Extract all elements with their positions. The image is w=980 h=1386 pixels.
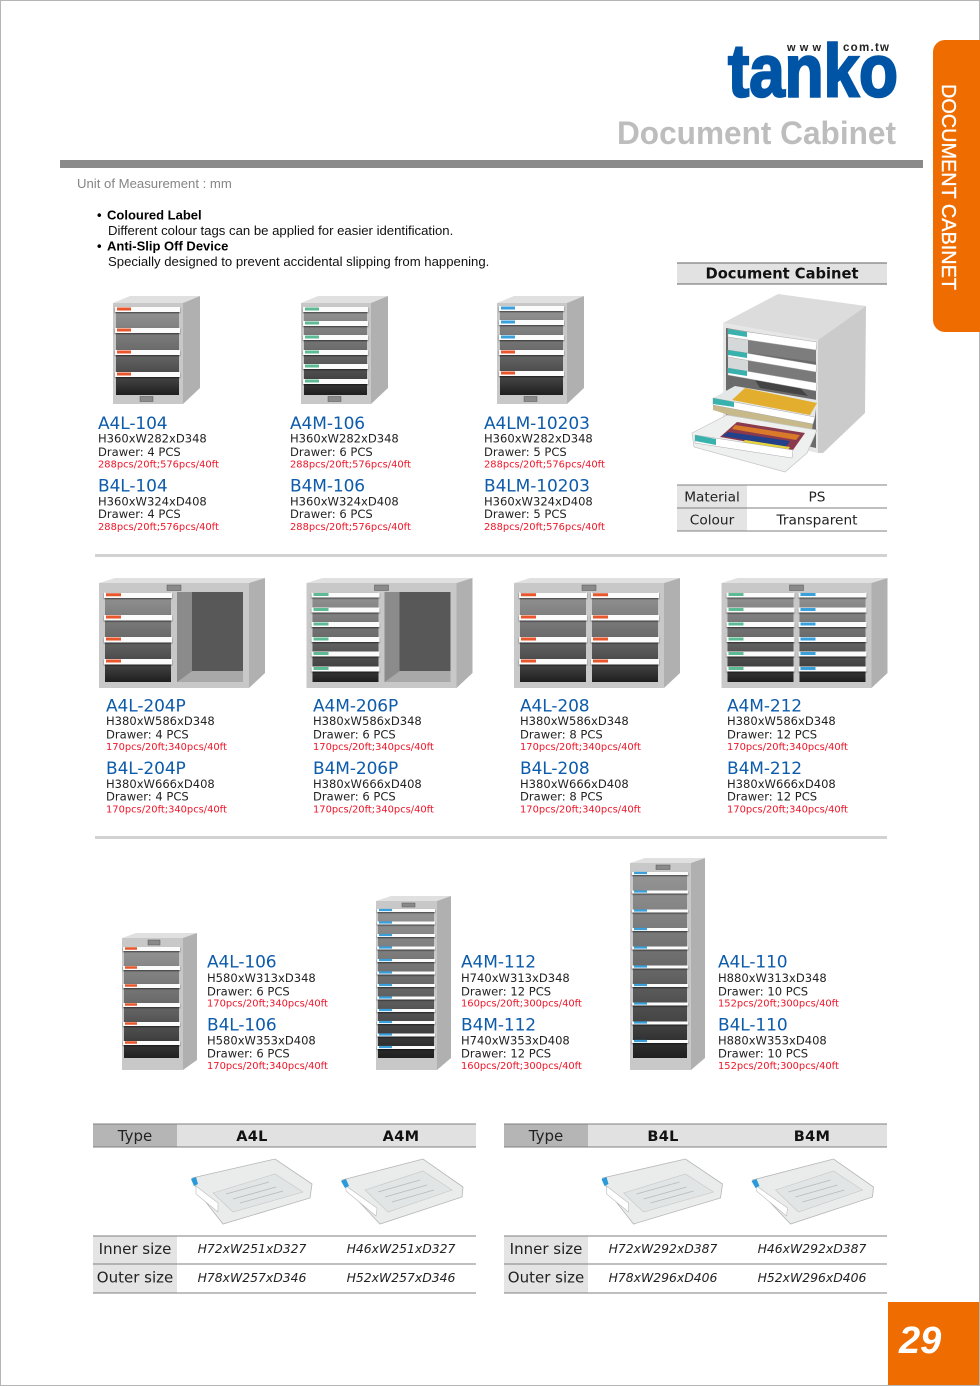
- model specs: A4L-106 / B4L-106: 170pcs/20ft;340pcs/40ft: [207, 998, 328, 1010]
- model specs: A4L-204P / B4L-204P: B4L-204P: [106, 759, 186, 779]
- page number: [888, 1302, 979, 1385]
- model specs: A4LM-10203 / B4LM-10203: [484, 414, 605, 533]
- model specs: A4L-106 / B4L-106: [207, 952, 328, 1072]
- model specs: A4L-104 / B4L-104: H360xW282xD348: [98, 432, 207, 446]
- model specs: A4L-104 / B4L-104: A4L-104: [98, 414, 168, 434]
- cabinet: A4M-206P: [306, 578, 472, 688]
- model specs: A4M-106 / B4M-106: A4M-106: [290, 414, 365, 434]
- model specs: A4L-104 / B4L-104: B4L-104: [98, 476, 168, 496]
- model specs: A4M-106 / B4M-106: Drawer: 6 PCS: [290, 507, 373, 521]
- model specs: A4L-110 / B4L-110: 152pcs/20ft;300pcs/40ft: [718, 1061, 839, 1072]
- model specs: A4L-110 / B4L-110: Drawer: 10 PCS: [718, 985, 808, 999]
- logo: tanko: www: [786, 42, 821, 54]
- model specs: A4L-204P / B4L-204P: H380xW666xD408: [106, 777, 215, 791]
- model specs: A4M-212 / B4M-212: 170pcs/20ft;340pcs/40ft: [727, 804, 848, 816]
- model specs: A4M-106 / B4M-106: H360xW282xD348: [290, 432, 399, 446]
- model specs: A4M-112 / B4M-112: H740xW353xD408: [461, 1034, 570, 1048]
- table: B4 drawer sizes: B4L: [647, 1129, 679, 1145]
- product specification table: Colour: [690, 512, 735, 528]
- model specs: A4L-204P / B4L-204P: [106, 696, 227, 816]
- model specs: A4L-208 / B4L-208: [520, 696, 641, 816]
- table: A4 drawer sizes: H52xW257xD346: [347, 1270, 456, 1285]
- product specification table: PS: [809, 490, 825, 506]
- product specification table: [677, 485, 887, 531]
- model specs: A4M-212 / B4M-212: A4M-212: [727, 696, 802, 716]
- model specs: A4M-206P / B4M-206P: H380xW586xD348: [313, 714, 422, 728]
- table: B4 drawer sizes: H78xW296xD406: [609, 1270, 718, 1285]
- feature list: Anti-Slip Off Device: [107, 238, 228, 254]
- model specs: A4L-208 / B4L-208: Drawer: 8 PCS: [520, 728, 603, 742]
- cabinet: A4L-110: [630, 858, 705, 1070]
- model specs: A4M-206P / B4M-206P: H380xW666xD408: [313, 777, 422, 791]
- model specs: A4L-208 / B4L-208: 170pcs/20ft;340pcs/40ft: [520, 742, 641, 753]
- table: B4 drawer sizes: B4M: [794, 1129, 830, 1145]
- side tab: document cabinet: [933, 40, 980, 332]
- model specs: A4L-208 / B4L-208: B4L-208: [520, 759, 590, 779]
- model specs: A4M-112 / B4M-112: 160pcs/20ft;300pcs/40ft: [461, 1061, 582, 1072]
- model specs: A4LM-10203 / B4LM-10203: Drawer: 5 PCS: [484, 507, 567, 521]
- table: B4 drawer sizes: H46xW292xD387: [758, 1241, 867, 1256]
- model specs: A4M-212 / B4M-212: H380xW586xD348: [727, 714, 836, 728]
- model specs: A4L-110 / B4L-110: A4L-110: [718, 952, 788, 972]
- model specs: A4M-206P / B4M-206P: 170pcs/20ft;340pcs/40ft: [313, 742, 434, 753]
- model specs: A4L-104 / B4L-104: Drawer: 4 PCS: [98, 507, 181, 521]
- model specs: A4M-112 / B4M-112: 160pcs/20ft;300pcs/40ft: [461, 998, 582, 1010]
- model specs: A4LM-10203 / B4LM-10203: H360xW282xD348: [484, 432, 593, 446]
- model specs: A4M-106 / B4M-106: Drawer: 6 PCS: [290, 445, 373, 459]
- side tab: document cabinet: DOCUMENT CABINET: [937, 84, 959, 290]
- model specs: A4L-110 / B4L-110: Drawer: 10 PCS: [718, 1046, 808, 1060]
- table: A4 drawer sizes: [93, 1124, 476, 1293]
- model specs: A4L-104 / B4L-104: 288pcs/20ft;576pcs/40ft: [98, 522, 219, 533]
- page title: Document Cabinet: [617, 115, 896, 151]
- model specs: A4M-112 / B4M-112: [461, 952, 582, 1072]
- product specification table: Material: [684, 490, 740, 506]
- product specification table: Transparent: [775, 512, 858, 528]
- model specs: A4M-112 / B4M-112: B4M-112: [461, 1016, 536, 1036]
- icon: B4L drawer: [602, 1159, 722, 1224]
- model specs: A4M-212 / B4M-212: Drawer: 12 PCS: [727, 728, 817, 742]
- model specs: A4L-106 / B4L-106: H580xW313xD348: [207, 971, 316, 985]
- model specs: A4LM-10203 / B4LM-10203: 288pcs/20ft;576pcs/40ft: [484, 460, 605, 471]
- table: A4 drawer sizes: Outer size: [97, 1268, 173, 1286]
- model specs: A4L-204P / B4L-204P: Drawer: 4 PCS: [106, 728, 189, 742]
- table: A4 drawer sizes: A4M: [383, 1129, 419, 1145]
- table: A4 drawer sizes: Inner size: [99, 1240, 171, 1258]
- product panel heading: [677, 263, 887, 284]
- icon: B4M drawer: [752, 1159, 874, 1224]
- product photo: transparent drawer cabinet: [692, 294, 866, 472]
- model specs: A4L-104 / B4L-104: 288pcs/20ft;576pcs/40ft: [98, 460, 219, 471]
- model specs: A4L-208 / B4L-208: A4L-208: [520, 696, 590, 716]
- model specs: A4L-204P / B4L-204P: H380xW586xD348: [106, 714, 215, 728]
- model specs: A4M-206P / B4M-206P: B4M-206P: [313, 759, 398, 779]
- model specs: A4L-204P / B4L-204P: 170pcs/20ft;340pcs/40ft: [106, 804, 227, 816]
- model specs: A4L-110 / B4L-110: B4L-110: [718, 1016, 788, 1036]
- model specs: A4M-212 / B4M-212: Drawer: 12 PCS: [727, 790, 817, 804]
- cabinet: A4L-106: [122, 933, 197, 1070]
- logo: tanko: com.tw: [843, 42, 889, 54]
- model specs: A4L-104 / B4L-104: Drawer: 4 PCS: [98, 445, 181, 459]
- model specs: A4M-206P / B4M-206P: [313, 696, 434, 816]
- model specs: A4L-208 / B4L-208: H380xW586xD348: [520, 714, 629, 728]
- model specs: A4L-204P / B4L-204P: A4L-204P: [106, 696, 186, 716]
- feature list: Coloured Label: [107, 208, 202, 222]
- table: B4 drawer sizes: Inner size: [510, 1240, 582, 1258]
- model specs: A4L-106 / B4L-106: 170pcs/20ft;340pcs/40ft: [207, 1061, 328, 1072]
- model specs: A4M-112 / B4M-112: H740xW313xD348: [461, 971, 570, 985]
- model specs: A4L-110 / B4L-110: H880xW353xD408: [718, 1034, 827, 1048]
- model specs: A4M-112 / B4M-112: A4M-112: [461, 952, 536, 972]
- model specs: A4L-104 / B4L-104: [98, 414, 219, 533]
- model specs: A4M-106 / B4M-106: 288pcs/20ft;576pcs/40ft: [290, 460, 411, 471]
- model specs: A4M-106 / B4M-106: [290, 414, 411, 533]
- model specs: A4M-106 / B4M-106: 288pcs/20ft;576pcs/40ft: [290, 522, 411, 533]
- cabinet: A4L-104: [113, 296, 200, 404]
- table: B4 drawer sizes: H72xW292xD387: [609, 1241, 718, 1256]
- table: A4 drawer sizes: H72xW251xD327: [198, 1241, 307, 1256]
- table: B4 drawer sizes: H52xW296xD406: [758, 1270, 867, 1285]
- model specs: A4L-208 / B4L-208: 170pcs/20ft;340pcs/40ft: [520, 804, 641, 816]
- model specs: A4L-110 / B4L-110: 152pcs/20ft;300pcs/40ft: [718, 998, 839, 1010]
- model specs: A4L-204P / B4L-204P: Drawer: 4 PCS: [106, 790, 189, 804]
- cabinet: A4LM-10203: [497, 296, 584, 404]
- model specs: A4L-106 / B4L-106: Drawer: 6 PCS: [207, 1046, 290, 1060]
- model specs: A4L-110 / B4L-110: [718, 952, 839, 1072]
- header rule: [60, 160, 923, 168]
- page number: 29: [898, 1320, 941, 1362]
- table: A4 drawer sizes: Type: [117, 1127, 152, 1145]
- icon: A4M drawer: [341, 1159, 463, 1224]
- logo: tanko: tanko: [728, 30, 898, 112]
- model specs: A4M-212 / B4M-212: B4M-212: [727, 759, 802, 779]
- table: A4 drawer sizes: H46xW251xD327: [347, 1241, 456, 1256]
- model specs: A4M-112 / B4M-112: Drawer: 12 PCS: [461, 1046, 551, 1060]
- feature list: •: [97, 238, 102, 254]
- model specs: A4L-106 / B4L-106: H580xW353xD408: [207, 1034, 316, 1048]
- model specs: A4L-106 / B4L-106: A4L-106: [207, 952, 276, 972]
- model specs: A4LM-10203 / B4LM-10203: 288pcs/20ft;576pcs/40ft: [484, 522, 605, 533]
- cabinet: A4M-212: [722, 578, 888, 688]
- model specs: A4LM-10203 / B4LM-10203: B4LM-10203: [484, 476, 590, 496]
- cabinet: A4L-204P: [99, 578, 265, 688]
- cabinet: A4L-208: [514, 578, 680, 688]
- table: B4 drawer sizes: [504, 1124, 887, 1293]
- model specs: A4L-204P / B4L-204P: 170pcs/20ft;340pcs/40ft: [106, 742, 227, 753]
- cabinet: A4M-106: [301, 296, 388, 404]
- model specs: A4LM-10203 / B4LM-10203: A4LM-10203: [484, 414, 590, 434]
- product panel heading: Document Cabinet: [706, 266, 858, 282]
- feature list: Different colour tags can be applied for easier identification.: [108, 223, 453, 238]
- model specs: A4M-212 / B4M-212: 170pcs/20ft;340pcs/40ft: [727, 742, 848, 753]
- model specs: A4L-106 / B4L-106: Drawer: 6 PCS: [207, 985, 290, 999]
- table: B4 drawer sizes: Outer size: [508, 1268, 584, 1286]
- feature list: [97, 208, 489, 269]
- feature list: •: [97, 208, 102, 222]
- model specs: A4M-206P / B4M-206P: Drawer: 6 PCS: [313, 728, 396, 742]
- model specs: A4LM-10203 / B4LM-10203: H360xW324xD408: [484, 494, 593, 508]
- model specs: A4LM-10203 / B4LM-10203: Drawer: 5 PCS: [484, 445, 567, 459]
- model specs: A4L-106 / B4L-106: B4L-106: [207, 1016, 277, 1036]
- model specs: A4L-208 / B4L-208: H380xW666xD408: [520, 777, 629, 791]
- table: A4 drawer sizes: A4L: [236, 1129, 268, 1145]
- model specs: A4M-106 / B4M-106: B4M-106: [290, 476, 365, 496]
- table: B4 drawer sizes: Type: [528, 1127, 563, 1145]
- model specs: A4M-106 / B4M-106: H360xW324xD408: [290, 494, 399, 508]
- icon: A4L drawer: [191, 1159, 312, 1224]
- model specs: A4L-208 / B4L-208: Drawer: 8 PCS: [520, 790, 603, 804]
- model specs: A4M-206P / B4M-206P: 170pcs/20ft;340pcs/40ft: [313, 804, 434, 816]
- model specs: A4M-212 / B4M-212: H380xW666xD408: [727, 777, 836, 791]
- model specs: A4M-112 / B4M-112: Drawer: 12 PCS: [461, 985, 551, 999]
- feature list: Specially designed to prevent accidental slipping from happening.: [108, 254, 489, 269]
- model specs: A4M-212 / B4M-212: [727, 696, 848, 816]
- model specs: A4L-104 / B4L-104: H360xW324xD408: [98, 494, 207, 508]
- model specs: A4M-206P / B4M-206P: A4M-206P: [313, 696, 398, 716]
- model specs: A4M-206P / B4M-206P: Drawer: 6 PCS: [313, 790, 396, 804]
- model specs: A4L-110 / B4L-110: H880xW313xD348: [718, 971, 827, 985]
- unit of measurement: Unit of Measurement : mm: [77, 176, 232, 191]
- table: A4 drawer sizes: H78xW257xD346: [198, 1270, 307, 1285]
- cabinet: A4M-112: [376, 896, 451, 1070]
